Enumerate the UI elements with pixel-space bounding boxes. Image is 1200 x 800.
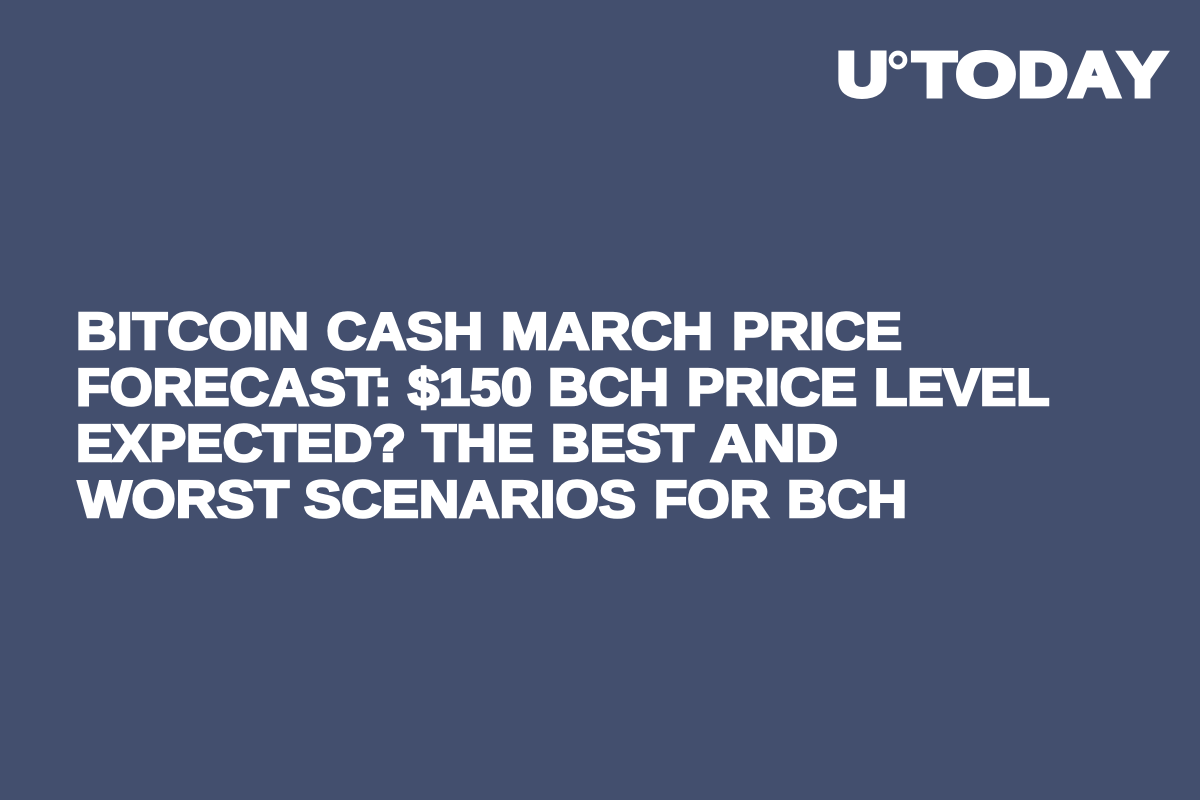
logo: U.Today: U <box>837 41 888 110</box>
title: BEST <box>551 415 694 473</box>
title: PRICE <box>687 359 857 417</box>
logo: U.Today: O <box>956 41 1016 110</box>
title: LEVEL <box>874 359 1050 417</box>
title: BITCOIN <box>76 303 309 361</box>
logo: U.Today <box>837 41 1166 110</box>
title: SCENARIOS <box>304 471 636 529</box>
title: CASH <box>326 303 483 361</box>
title: FOR <box>654 471 769 529</box>
title: PRICE <box>732 303 902 361</box>
logo: U.Today: D <box>1018 41 1068 110</box>
logo: U.Today: Y <box>1119 41 1166 110</box>
title <box>76 303 1050 529</box>
title: FORECAST: <box>76 359 392 417</box>
title: EXPECTED? <box>76 415 406 473</box>
title: MARCH <box>501 303 713 361</box>
title: $150 <box>408 359 532 417</box>
title: WORST <box>78 471 289 529</box>
title: THE <box>422 415 534 473</box>
logo: U.Today: T <box>913 41 956 110</box>
title: BCH <box>787 471 907 529</box>
title: BCH <box>548 359 669 417</box>
logo: U.Today: A <box>1069 41 1120 110</box>
title: AND <box>710 415 838 473</box>
